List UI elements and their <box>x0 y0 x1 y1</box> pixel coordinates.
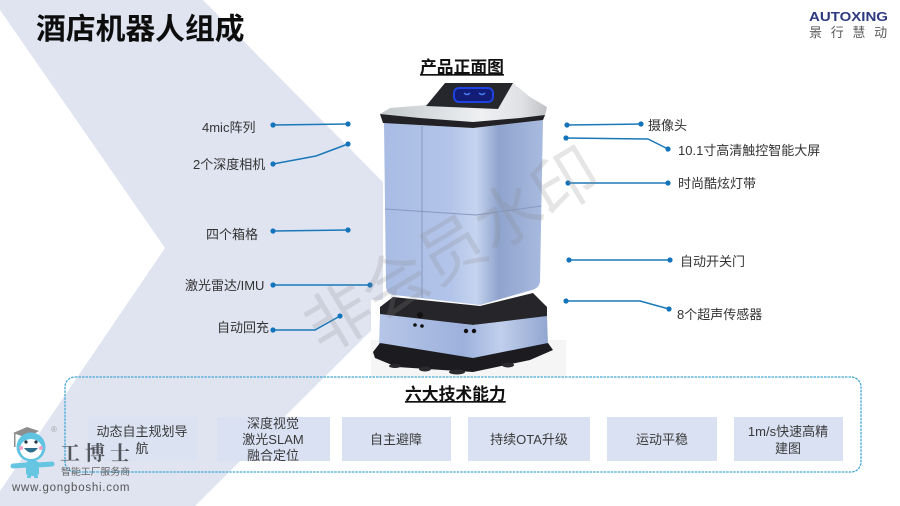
callout: auto door <box>566 254 745 269</box>
gongboshi logo <box>11 425 130 494</box>
registered mark: ® <box>51 425 57 434</box>
title: 酒店机器人组成 <box>36 13 245 46</box>
logo url: www.gongboshi.com <box>11 482 130 494</box>
capability 2 <box>217 416 330 463</box>
capability 2: 深度视觉 <box>247 416 299 431</box>
callout: auto recharge <box>217 313 343 335</box>
panel: six technical capabilities <box>65 377 861 472</box>
callout: lidar IMU <box>185 278 373 293</box>
callout: camera <box>564 118 687 133</box>
right callouts <box>563 118 820 322</box>
logo: AUTOXING <box>809 9 896 40</box>
capability 3 <box>342 417 451 461</box>
callout: touch screen: 10.1寸高清触控智能大屏 <box>678 143 820 158</box>
robot body <box>384 120 543 305</box>
callout: light strip: 时尚酷炫灯带 <box>678 176 756 191</box>
capability 2: 激光SLAM <box>242 432 304 447</box>
logo: AUTOXING: 景行慧动 <box>809 25 896 40</box>
robot dark trim <box>380 114 545 128</box>
logo name: 博 <box>85 437 105 466</box>
logo: AUTOXING: AUTOXING <box>809 9 888 24</box>
capability 2: 融合定位 <box>247 448 299 463</box>
capability 1: 动态自主规划导 <box>96 424 188 439</box>
callout: four compartments <box>206 227 351 242</box>
logo tagline: 智能工厂服务商 <box>61 465 130 478</box>
callout: ultrasonic sensors <box>563 298 762 322</box>
capability 6: 建图 <box>775 441 801 456</box>
callout: 4mic array <box>202 120 351 135</box>
robot lower dark collar <box>380 293 547 325</box>
capability 1: 航 <box>135 441 149 456</box>
background chevron <box>0 0 451 506</box>
callout: camera: 摄像头 <box>648 118 687 133</box>
callout: ultrasonic sensors: 8个超声传感器 <box>677 307 762 322</box>
callout: depth cameras <box>193 141 351 172</box>
heading: product front view: 产品正面图 <box>420 58 504 77</box>
callout: four compartments: 四个箱格 <box>206 227 258 242</box>
robot screen face <box>454 88 493 102</box>
icon: mascot <box>13 427 52 478</box>
heading: six capabilities: 六大技术能力 <box>405 385 506 404</box>
callout: light strip <box>565 176 756 191</box>
capability 3: 自主避障 <box>370 432 422 447</box>
watermark: 非会员水印 <box>292 133 612 367</box>
logo name: 士 <box>110 437 130 466</box>
callout: depth cameras: 2个深度相机 <box>193 157 265 172</box>
robot photo backdrop <box>371 88 566 377</box>
callout: 4mic array: 4mic阵列 <box>202 120 255 135</box>
capability 6 <box>734 417 843 461</box>
robot screen <box>426 83 513 109</box>
capability 5 <box>607 417 717 461</box>
capability 5: 运动平稳 <box>636 432 688 447</box>
robot base band <box>379 314 548 360</box>
callout: auto door: 自动开关门 <box>680 254 745 269</box>
callout: touch screen <box>563 135 820 158</box>
robot top cap <box>380 83 547 122</box>
capability 1 <box>88 417 197 461</box>
capability 4: 持续OTA升级 <box>490 432 568 447</box>
robot illustration <box>373 83 553 374</box>
left callouts <box>185 120 373 335</box>
callout: lidar IMU: 激光雷达/IMU <box>185 278 264 293</box>
callout: auto recharge: 自动回充 <box>217 320 269 335</box>
logo name: 工 <box>60 437 80 466</box>
capability 6: 1m/s快速高精 <box>748 424 828 439</box>
robot base foot <box>373 343 553 372</box>
capability 4 <box>468 417 590 461</box>
